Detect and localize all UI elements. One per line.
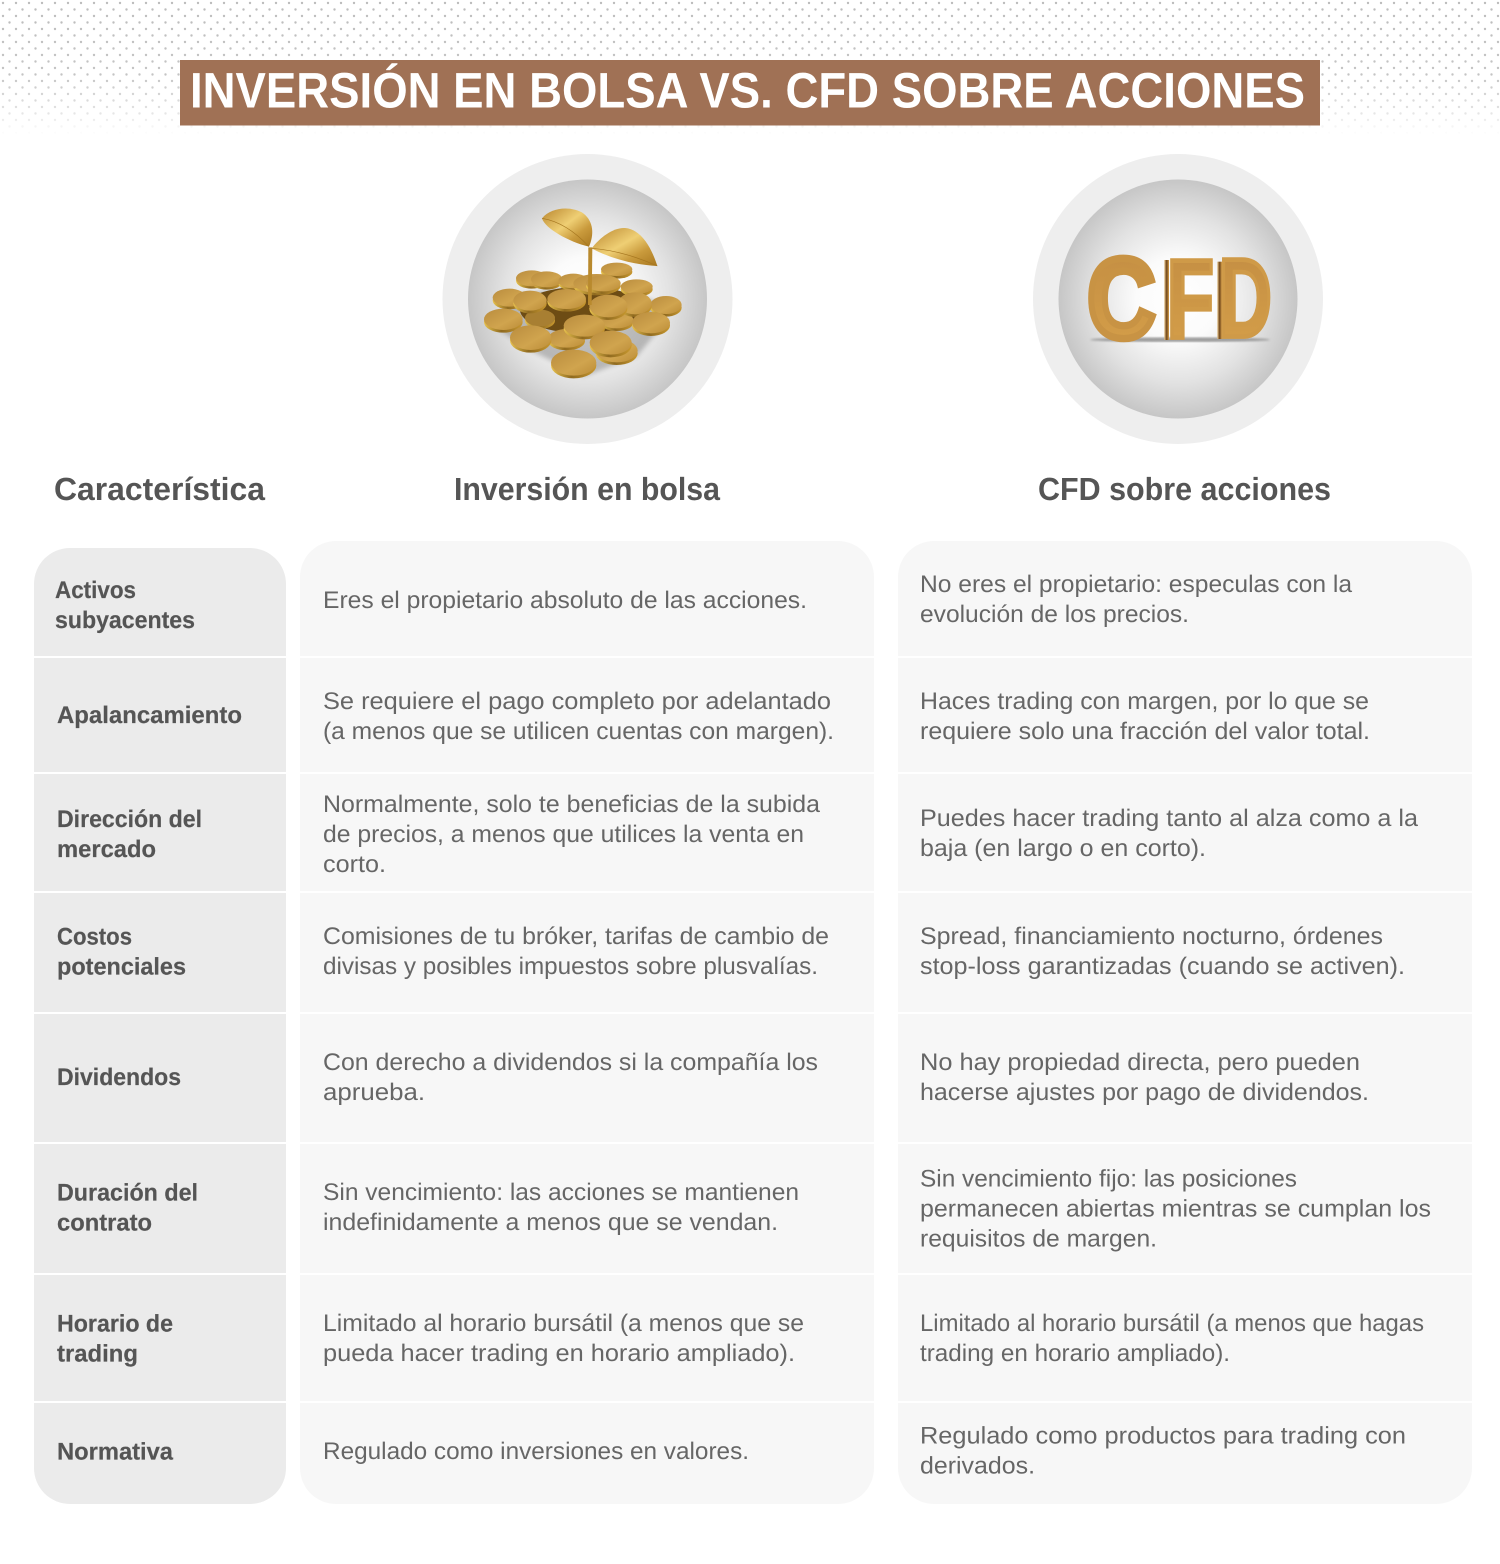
text: horario de trading bbox=[323, 1310, 804, 1367]
text: normativa: Regulado como productos para trading con bbox=[920, 1422, 1406, 1450]
label: Activos subyacentes bbox=[55, 577, 195, 634]
text: dividendos bbox=[323, 1049, 818, 1106]
text: apalancamiento bbox=[323, 688, 834, 745]
icon: gold CFD letters: C bbox=[1087, 235, 1155, 362]
panel: inversión en bolsa column bbox=[324, 590, 832, 1464]
label: Horario de trading bbox=[57, 1310, 173, 1368]
panel: CFD sobre acciones column bbox=[920, 574, 1430, 1474]
icon: gold CFD letters bbox=[1033, 154, 1323, 444]
text: dirección del mercado: de precios, a menos que utilices la venta en bbox=[323, 821, 804, 848]
label: Dividendos: Dividendos bbox=[57, 1064, 181, 1091]
label: Duración del contrato bbox=[57, 1180, 198, 1236]
text: duración del contrato: Sin vencimiento: las acciones se mantienen bbox=[323, 1179, 799, 1206]
text: costos potenciales: stop-loss garantizadas (cuando se activen). bbox=[920, 953, 1405, 980]
background dot pattern bbox=[0, 0, 1500, 135]
text: duración del contrato bbox=[323, 1179, 799, 1236]
text: normativa bbox=[920, 1422, 1406, 1480]
text: apalancamiento: (a menos que se utilicen cuentas con margen). bbox=[323, 718, 834, 745]
text: duración del contrato: Sin vencimiento fijo: las posiciones bbox=[920, 1166, 1297, 1192]
text: dividendos: Con derecho a dividendos si la compañía los bbox=[323, 1049, 818, 1076]
label: Costos potenciales bbox=[57, 924, 186, 980]
text: dirección del mercado: Puedes hacer trading tanto al alza como a la bbox=[920, 805, 1419, 832]
title banner: INVERSIÓN EN BOLSA VS. CFD SOBRE ACCIONES bbox=[190, 62, 1305, 118]
label: Duración del contrato: Duración del bbox=[57, 1180, 198, 1206]
text: apalancamiento: requiere solo una fracción del valor total. bbox=[920, 718, 1370, 745]
text: apalancamiento bbox=[920, 688, 1370, 745]
text: normativa: Regulado como inversiones en valores. bbox=[323, 1438, 749, 1465]
icon: gold CFD letters: D bbox=[1219, 236, 1272, 360]
text: activos subyacentes: evolución de los precios. bbox=[920, 601, 1189, 628]
label: Duración del contrato: contrato bbox=[57, 1210, 152, 1236]
text: costos potenciales bbox=[323, 923, 829, 980]
text: horario de trading: pueda hacer trading en horario ampliado). bbox=[323, 1340, 795, 1367]
icon: gold CFD letters: F bbox=[1167, 236, 1214, 361]
label: Activos subyacentes: Activos bbox=[55, 577, 136, 604]
text: normativa: derivados. bbox=[920, 1452, 1035, 1480]
text: horario de trading: Limitado al horario bursátil (a menos que hagas bbox=[920, 1310, 1424, 1337]
text: activos subyacentes: No eres el propietario: especulas con la bbox=[920, 571, 1353, 598]
text: duración del contrato: requisitos de margen. bbox=[920, 1226, 1157, 1252]
text: dirección del mercado: baja (en largo o en corto). bbox=[920, 835, 1206, 862]
text: costos potenciales: divisas y posibles impuestos sobre plusvalías. bbox=[323, 953, 818, 980]
column heading: CFD sobre acciones: CFD sobre acciones bbox=[1038, 471, 1331, 507]
text: horario de trading: Limitado al horario bursátil (a menos que se bbox=[323, 1310, 804, 1337]
panel: característica column bbox=[34, 548, 286, 1504]
label: Costos potenciales: Costos bbox=[57, 924, 132, 950]
label: Activos subyacentes: subyacentes bbox=[55, 607, 195, 634]
label: Dirección del mercado: Dirección del bbox=[57, 806, 202, 833]
label: Dirección del mercado: mercado bbox=[57, 836, 156, 863]
text: costos potenciales bbox=[920, 923, 1405, 980]
text: dirección del mercado bbox=[920, 805, 1419, 862]
text: dirección del mercado: corto. bbox=[323, 851, 386, 878]
icon: gold coins with sprout bbox=[442, 154, 732, 444]
label: Costos potenciales: potenciales bbox=[57, 954, 186, 980]
label: Dirección del mercado bbox=[57, 806, 202, 863]
label: Normativa: Normativa bbox=[57, 1438, 174, 1466]
column heading: Característica: Característica bbox=[54, 471, 265, 507]
text: activos subyacentes: Eres el propietario absoluto de las acciones. bbox=[323, 587, 807, 614]
label: Horario de trading: trading bbox=[57, 1340, 138, 1368]
text: dirección del mercado: Normalmente, solo te beneficias de la subida bbox=[323, 791, 821, 818]
column heading: Inversión en bolsa: Inversión en bolsa bbox=[454, 471, 720, 507]
text: dirección del mercado bbox=[323, 791, 821, 878]
label: Horario de trading: Horario de bbox=[57, 1310, 173, 1338]
text: apalancamiento: Se requiere el pago completo por adelantado bbox=[323, 688, 831, 715]
text: costos potenciales: Spread, financiamiento nocturno, órdenes bbox=[920, 923, 1383, 950]
text: costos potenciales: Comisiones de tu bróker, tarifas de cambio de bbox=[323, 923, 829, 950]
text: dividendos: No hay propiedad directa, pero pueden bbox=[920, 1049, 1360, 1076]
text: dividendos bbox=[920, 1049, 1369, 1106]
text: horario de trading: trading en horario ampliado). bbox=[920, 1340, 1230, 1367]
text: duración del contrato bbox=[920, 1166, 1431, 1252]
text: dividendos: hacerse ajustes por pago de dividendos. bbox=[920, 1079, 1369, 1106]
text: duración del contrato: indefinidamente a menos que se vendan. bbox=[323, 1209, 778, 1236]
text: duración del contrato: permanecen abiertas mientras se cumplan los bbox=[920, 1196, 1431, 1222]
text: apalancamiento: Haces trading con margen, por lo que se bbox=[920, 688, 1369, 715]
label: Apalancamiento: Apalancamiento bbox=[57, 702, 242, 729]
text: activos subyacentes bbox=[920, 571, 1353, 628]
text: dividendos: aprueba. bbox=[323, 1079, 425, 1106]
text: horario de trading bbox=[920, 1310, 1424, 1367]
